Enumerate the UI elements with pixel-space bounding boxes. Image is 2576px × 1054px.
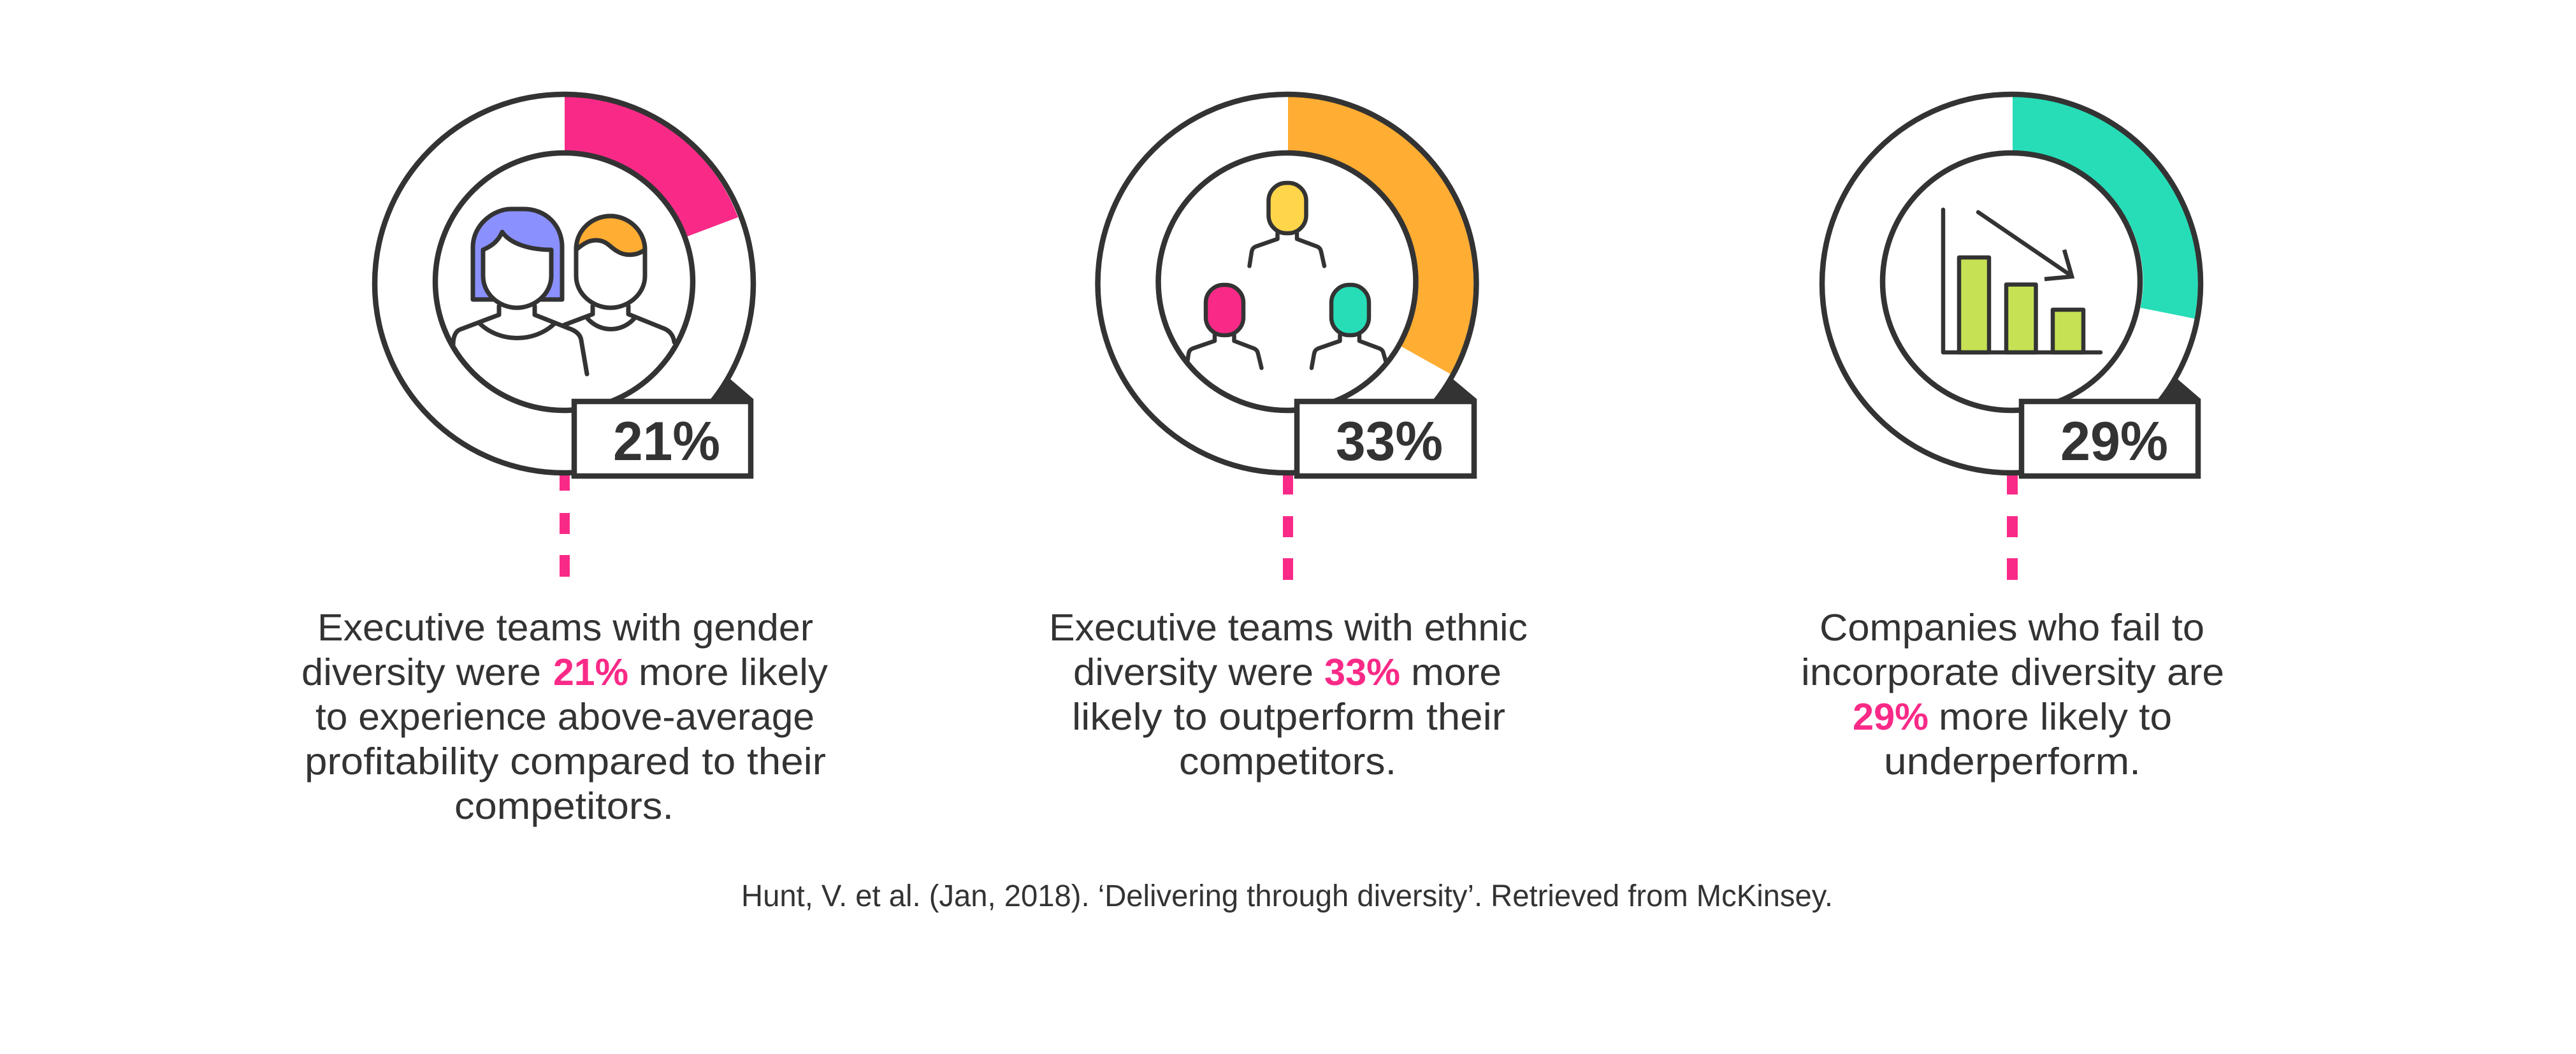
text block: more likely — [639, 651, 829, 693]
donut chart: 33% — [1097, 94, 1476, 473]
dashed connector — [2007, 474, 2018, 580]
value callout: 21% — [613, 411, 720, 472]
text block: 29% — [1853, 696, 1928, 738]
panel: gender diversity — [301, 94, 829, 827]
panel: failure to incorporate diversity — [1801, 94, 2224, 783]
text block: more — [1411, 651, 1501, 693]
icon: two people — [453, 209, 674, 374]
dashed connector — [1283, 474, 1293, 580]
text block — [301, 607, 829, 827]
text block: incorporate diversity are — [1801, 651, 2224, 693]
text block: likely to outperform their — [1072, 696, 1505, 738]
text block: Companies who fail to — [1820, 607, 2204, 649]
value callout — [574, 379, 753, 476]
value callout — [1297, 379, 1477, 476]
text block: competitors. — [1179, 740, 1396, 783]
text block: 21% — [553, 651, 628, 693]
text block: more likely to — [1939, 696, 2172, 738]
value callout — [2022, 379, 2201, 476]
text block: diversity were — [1073, 651, 1313, 693]
value callout: 33% — [1336, 411, 1443, 472]
dashed connector — [560, 474, 570, 577]
icon: declining bar chart — [1943, 210, 2101, 352]
text block: competitors. — [454, 785, 674, 827]
text block — [1801, 607, 2224, 783]
text block: Executive teams with gender — [317, 607, 813, 649]
text block: 33% — [1324, 651, 1400, 693]
text block: profitability compared to their — [305, 740, 826, 783]
citation: Hunt, V. et al. (Jan, 2018). ‘Delivering through diversity’. Retrieved from McKinsey. — [741, 879, 1833, 913]
donut chart: 29% — [1822, 94, 2201, 473]
text block: Executive teams with ethnic — [1049, 607, 1528, 649]
icon: three people — [1187, 183, 1386, 368]
text block: to experience above-average — [315, 696, 814, 738]
text block: underperform. — [1884, 740, 2141, 783]
panel: ethnic diversity — [1049, 94, 1528, 783]
text block — [1049, 607, 1528, 783]
value callout: 29% — [2060, 411, 2168, 472]
donut chart: 21% — [375, 94, 753, 473]
text block: diversity were — [301, 651, 541, 693]
